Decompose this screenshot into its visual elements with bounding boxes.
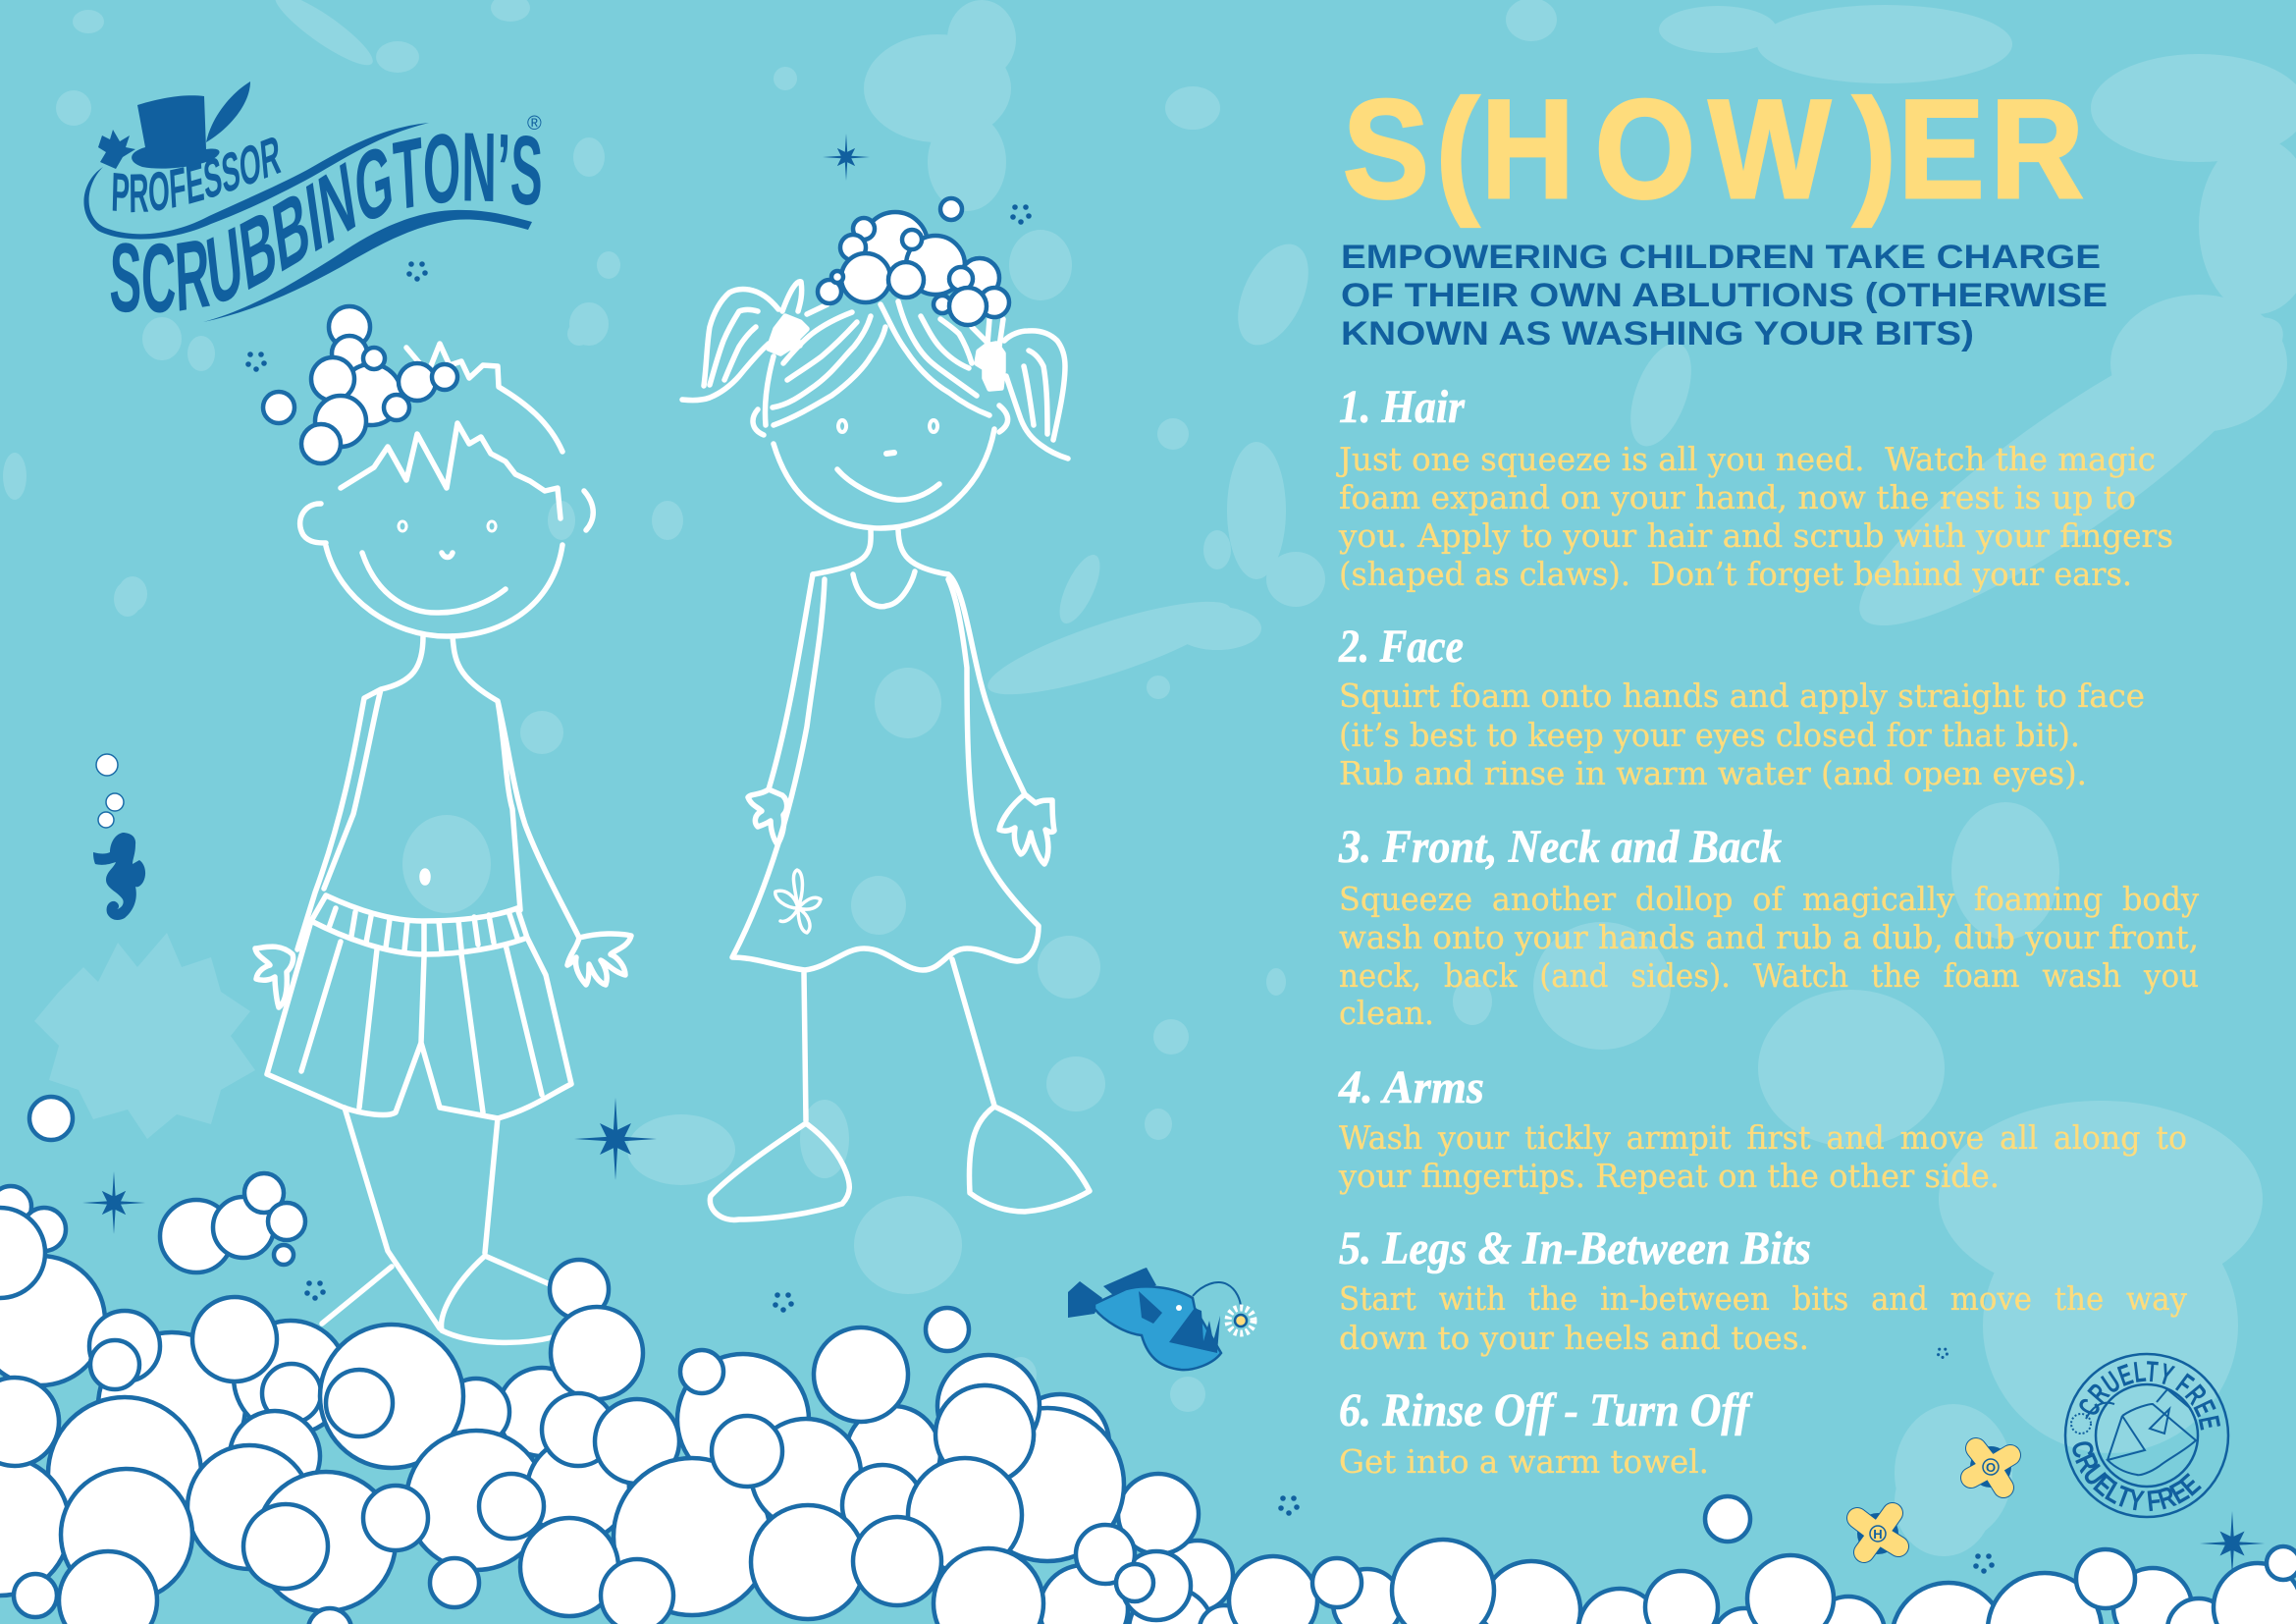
fish body xyxy=(1095,1286,1221,1370)
subtitle xyxy=(1341,239,2108,352)
girl pigtail right xyxy=(1004,331,1068,459)
girl nose xyxy=(886,453,894,454)
step 5: Legs and In-Between Bits xyxy=(1339,1222,2187,1357)
girl head xyxy=(765,356,994,528)
badge: cruelty free xyxy=(2063,1353,2230,1518)
body text: clean. xyxy=(1339,994,1434,1032)
boy head xyxy=(326,545,562,636)
heading: 5. Legs & In-Between Bits xyxy=(1339,1222,1811,1274)
girl hands xyxy=(748,789,1054,864)
swoosh: lower banner xyxy=(203,210,532,322)
registered mark: ® xyxy=(527,113,542,135)
body text: Squirt foam onto hands and apply straight to face xyxy=(1339,677,2145,715)
body text xyxy=(1339,677,2145,792)
heading: 1. Hair xyxy=(1339,381,1466,433)
body text: wash onto your hands and rub a dub, dub your front, xyxy=(1339,918,2199,956)
boy shorts waistband xyxy=(311,895,527,954)
fish dorsal fin xyxy=(1103,1268,1156,1296)
valve: O xyxy=(1971,1448,2010,1488)
boy smile xyxy=(362,553,506,613)
foam bubbles, bottom right xyxy=(1200,1496,2296,1624)
body text: Start with the in-between bits and move the way xyxy=(1339,1279,2187,1318)
boy legs and feet xyxy=(322,1108,553,1342)
boy hands xyxy=(255,934,631,1007)
boy nose xyxy=(442,553,453,558)
heading: 2. Face xyxy=(1338,621,1464,673)
foam on boy's hair xyxy=(263,306,457,463)
star xyxy=(82,1171,145,1234)
body text xyxy=(1339,880,2199,1032)
title: S(HOW)ER xyxy=(1343,72,2084,228)
foam on girl's hair xyxy=(818,198,1009,325)
step 1: Hair xyxy=(1336,381,2173,593)
badge lure xyxy=(2071,1414,2091,1434)
star xyxy=(2200,1511,2265,1576)
heading: 4. Arms xyxy=(1338,1061,1484,1113)
body text: you. Apply to your hair and scrub with your fingers xyxy=(1338,516,2173,555)
valve: H: H xyxy=(1873,1527,1883,1542)
logo: Professor Scrubbington's xyxy=(83,81,542,322)
body text: (shaped as claws). Don’t forget behind your ears. xyxy=(1339,555,2132,593)
heading: 6. Rinse Off - Turn Off xyxy=(1339,1384,1753,1436)
badge fish xyxy=(2086,1389,2196,1475)
boy shorts xyxy=(267,921,571,1118)
girl ears xyxy=(753,406,1008,435)
body text: Get into a warm towel. xyxy=(1339,1442,1709,1481)
figure: girl xyxy=(682,282,1090,1219)
swoosh: upper banner xyxy=(83,123,429,240)
foam bubbles, bottom left xyxy=(0,1097,1233,1624)
step 3: Front, Neck and Back xyxy=(1338,821,2199,1032)
body text: Just one squeeze is all you need. Watch the magic xyxy=(1336,440,2156,478)
girl legs and feet xyxy=(710,959,1090,1219)
boy hair xyxy=(341,344,562,518)
fish side fin xyxy=(1139,1291,1162,1324)
badge text: CRUELTY FREE xyxy=(2072,1441,2202,1512)
fish tail xyxy=(1068,1281,1102,1318)
girl fringe left xyxy=(773,304,885,425)
boy ears xyxy=(300,491,593,543)
body text: foam expand on your hand, now the rest is up to xyxy=(1339,478,2136,516)
star xyxy=(574,1098,657,1180)
girl fringe right xyxy=(881,301,1003,415)
step 4: Arms xyxy=(1338,1061,2187,1195)
girl bow left xyxy=(782,282,802,311)
body text: Wash your tickly armpit first and move all along to xyxy=(1339,1118,2187,1157)
boy eyes xyxy=(399,521,496,531)
girl dress flower xyxy=(775,870,821,933)
badge text: CRUELTY FREE xyxy=(2079,1361,2220,1431)
girl hair tie left xyxy=(769,316,807,353)
girl dress xyxy=(732,579,1039,970)
fish lure xyxy=(1228,1308,1254,1333)
step 6: Rinse Off - Turn Off xyxy=(1339,1384,1753,1481)
valve: H xyxy=(1857,1513,1898,1552)
subtitle: EMPOWERING CHILDREN TAKE CHARGE xyxy=(1341,239,2101,276)
heading: 3. Front, Neck and Back xyxy=(1338,821,1782,873)
anglerfish xyxy=(1068,1268,1254,1370)
body text xyxy=(1336,440,2173,593)
icon: glove hand xyxy=(98,130,135,169)
girl neck and collar xyxy=(813,530,948,607)
star xyxy=(823,134,870,181)
girl arms xyxy=(769,574,1025,794)
figure: boy xyxy=(255,344,631,1342)
subtitle: OF THEIR OWN ABLUTIONS (OTHERWISE xyxy=(1341,277,2108,314)
body text: (it’s best to keep your eyes closed for that bit). xyxy=(1339,716,2080,754)
icon: top hat xyxy=(132,95,220,169)
valve: O: O xyxy=(1986,1460,1996,1475)
body text xyxy=(1338,1118,2187,1195)
fish lure line xyxy=(1193,1282,1241,1308)
dot clusters xyxy=(245,204,1995,1574)
subtitle: KNOWN AS WASHING YOUR BITS) xyxy=(1341,315,1974,352)
logo text: Scrubbington's: SCRUBBINGTON’S xyxy=(110,134,541,312)
girl smile xyxy=(837,469,939,500)
body text: your fingertips. Repeat on the other side. xyxy=(1338,1157,2000,1195)
fish eye xyxy=(1176,1305,1182,1311)
fish mouth and teeth xyxy=(1169,1308,1220,1353)
body text: neck, back (and sides). Watch the foam wash you xyxy=(1339,956,2199,995)
girl eyes xyxy=(838,420,937,432)
icon: seahorse xyxy=(93,833,145,920)
logo text: Professor: PROFESSOR xyxy=(112,137,281,212)
icon: feather xyxy=(206,81,250,142)
girl pigtail left xyxy=(682,289,778,401)
body text: Rub and rinse in warm water (and open eyes). xyxy=(1339,754,2087,792)
boy navel xyxy=(422,871,428,883)
step 2: Face xyxy=(1338,621,2145,792)
badge rings xyxy=(2065,1354,2228,1517)
body text: down to your heels and toes. xyxy=(1339,1319,1809,1357)
body text: Squeeze another dollop of magically foaming body xyxy=(1339,880,2199,918)
rising bubbles above seahorse xyxy=(96,754,124,828)
body text xyxy=(1339,1279,2187,1357)
girl hair tie right xyxy=(977,344,1003,389)
boy neck and torso xyxy=(297,636,579,949)
